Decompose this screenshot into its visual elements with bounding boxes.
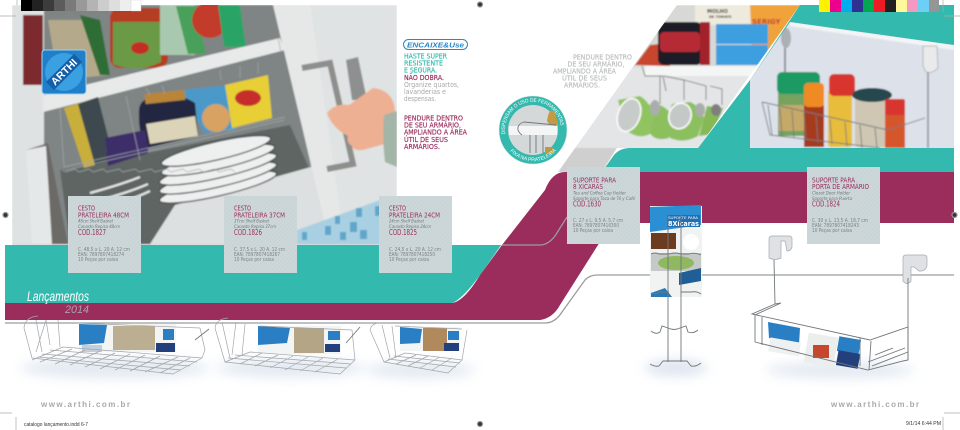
card: suporte para porta de armario	[807, 167, 880, 244]
url right: www.arthi.com.br	[830, 400, 919, 409]
card: suporte para 8 xicaras: COD.1630	[573, 200, 601, 208]
heading: Lançamentos 2014: 2014	[64, 304, 89, 316]
badge: dispensam o uso de ferramentas: DISPENSAM O USO DE FERRAMENTAS	[501, 98, 564, 134]
card: cesto prateleira 24cm: COD.1825	[389, 228, 417, 237]
card: cesto prateleira 24cm: Canasto Repisa 24cm	[389, 224, 431, 230]
text: haste super resistente: E SEGURA.	[404, 66, 437, 74]
card: suporte para 8 xicaras: C. 27 x L. 9,5 A. 5,7 cm	[573, 218, 623, 224]
text: pendure dentro maroon	[404, 114, 467, 151]
spice jars	[777, 72, 905, 148]
text: pendure dentro maroon: ARMÁRIOS.	[404, 142, 440, 151]
logo: Encaixe & Use	[404, 40, 468, 50]
text: haste super resistente: RESISTENTE	[404, 60, 443, 68]
text: pendure dentro maroon: AMPLIANDO A ÁREA	[404, 128, 467, 136]
card: suporte para 8 xicaras: 8 XÍCARAS	[573, 182, 603, 191]
product: basket 48cm	[20, 316, 210, 378]
heading: Lançamentos 2014: Lançamentos	[27, 288, 89, 304]
cmyk colour bar	[819, 0, 939, 12]
text: haste super resistente: HASTE SUPER	[404, 52, 447, 60]
green cups	[613, 95, 723, 141]
logo: ARTHI badge	[42, 50, 86, 94]
door handle	[302, 63, 353, 169]
panel: kitchen cabinet photo	[12, 2, 397, 245]
panel: cups photo: DE TOMATE	[709, 15, 732, 19]
text: pendure dentro gray: DE SEU ARMÁRIO,	[568, 60, 624, 68]
card: suporte para 8 xicaras: SUPORTE PARA	[573, 176, 616, 184]
card: cesto prateleira 48cm: 10 Peças por caixa	[78, 257, 118, 263]
logo: Encaixe & Use: ENCAIXE&Use	[407, 42, 464, 50]
jar and boxes	[182, 85, 236, 133]
plates	[160, 134, 276, 204]
panel: cups photo	[555, 5, 805, 175]
text: pendure dentro maroon: PENDURE DENTRO	[404, 114, 463, 122]
top shelf groceries	[23, 2, 246, 85]
card: cesto prateleira 37cm: 37cm Shelf Basket	[234, 218, 269, 224]
card: cesto prateleira 48cm: Canasto Repisa 48cm	[78, 224, 120, 230]
card: cesto prateleira 24cm: 24cm Shelf Basket	[389, 218, 424, 224]
card: suporte para porta de armario: EAN: 7897807418243	[812, 223, 859, 229]
hooks	[642, 66, 722, 105]
hand	[327, 88, 395, 150]
text: pendure dentro gray: PENDURE DENTRO	[573, 54, 632, 62]
card: suporte para porta de armario: Closet Door Holder	[812, 190, 851, 196]
text: haste super resistente: despensas.	[404, 95, 436, 103]
card: cesto prateleira 48cm: CESTO	[78, 204, 95, 212]
panel: cups photo: SERIGY	[752, 18, 781, 26]
card: cesto prateleira 24cm: 10 Peças por caixa	[389, 257, 429, 263]
text: pendure dentro gray: AMPLIANDO A ÁREA	[553, 66, 616, 76]
tin	[64, 98, 98, 169]
card: suporte para porta de armario: PORTA DE ARMÁRIO	[812, 182, 869, 191]
text: haste super resistente: NÃO DOBRA.	[404, 73, 444, 82]
card: cesto prateleira 24cm: C. 24,5 x L. 20 A. 12 cm	[389, 247, 441, 253]
card: cesto prateleira 37cm: EAN: 7897807418267	[234, 252, 280, 258]
card: cesto prateleira 24cm	[379, 196, 452, 273]
teal band left page	[5, 245, 501, 303]
shelf	[43, 38, 285, 112]
teal band right page	[602, 5, 954, 172]
text: pendure dentro gray: ÚTIL DE SEUS	[562, 74, 607, 82]
card: cesto prateleira 48cm: PRATELEIRA 48CM	[78, 212, 129, 220]
card: cesto prateleira 37cm: Canasto Repisa 37cm	[234, 224, 276, 230]
hook left	[785, 22, 787, 82]
card: cesto prateleira 24cm: PRATELEIRA 24CM	[389, 212, 440, 220]
card: suporte para porta de armario: C. 30 x L. 13,5 A. 18,7 cm	[812, 218, 868, 224]
card: cesto prateleira 37cm: C. 37,5 x L. 20 A. 12 cm	[234, 247, 285, 253]
card: cesto prateleira 37cm: PRATELEIRA 37CM	[234, 212, 285, 220]
card: suporte para 8 xicaras	[567, 167, 640, 244]
footer slug right: 9/1/14 6:44 PM	[906, 421, 941, 427]
card: suporte para porta de armario: 10 Peças por caixa	[812, 228, 852, 234]
product: basket 24cm	[365, 323, 475, 378]
text: haste super resistente: Organize quartos,	[404, 81, 459, 89]
badge: dispensam o uso de ferramentas: FIXA NA PRATELEIRA	[510, 148, 556, 162]
product: eight cup holder with packaging: 8Xícaras	[668, 220, 699, 228]
panel: door holder photo	[745, 20, 955, 150]
footer slug left: catalogo lançamento.indd 6-7	[24, 422, 88, 428]
product: eight cup holder with packaging: SUPORTE PARA	[668, 216, 699, 220]
gray colour bar	[21, 0, 141, 11]
card: cesto prateleira 37cm: COD.1826	[234, 228, 262, 237]
card: suporte para 8 xicaras: Soporte para Taza de Té y Café	[573, 195, 635, 202]
hook right	[923, 46, 938, 72]
spice basket wire	[762, 102, 925, 148]
text: pendure dentro gray: ARMÁRIOS.	[564, 80, 600, 90]
heading: Lançamentos 2014	[27, 288, 89, 316]
badge: dispensam o uso de ferramentas	[498, 96, 568, 164]
card: suporte para 8 xicaras: 10 Peças por caixa	[573, 228, 613, 234]
shelf groceries	[695, 5, 755, 25]
product: eight cup holder with packaging	[644, 205, 708, 376]
teal wedge	[480, 245, 501, 275]
text: pendure dentro maroon: DE SEU ARMÁRIO,	[404, 120, 461, 130]
blue tile	[297, 200, 379, 245]
maroon band left page	[5, 172, 954, 320]
text: pendure dentro maroon: ÚTIL DE SEUS	[404, 135, 448, 144]
url left: www.arthi.com.br	[40, 400, 130, 409]
card: cesto prateleira 37cm: CESTO	[234, 204, 251, 212]
card: cesto prateleira 24cm: CESTO	[389, 204, 406, 212]
text: haste super resistente	[404, 52, 459, 103]
card: cesto prateleira 48cm: COD.1827	[78, 228, 106, 237]
card: suporte para porta de armario: Soporte para Puerta	[812, 196, 852, 202]
card: cesto prateleira 48cm: 48cm Shelf Basket	[78, 218, 113, 224]
card: cesto prateleira 24cm: EAN: 7897807418250	[389, 252, 435, 258]
text: haste super resistente: lavanderias e	[404, 88, 446, 96]
panel: cups photo: MOLHO	[707, 9, 728, 15]
card: suporte para 8 xicaras: EAN: 7897807416300	[573, 223, 619, 229]
card: cesto prateleira 48cm: C. 48,5 x L. 20 A. 12 cm	[78, 247, 130, 253]
product: basket 37cm	[215, 318, 365, 377]
gray rule lines	[5, 217, 954, 323]
card: cesto prateleira 37cm: 10 Peças por caixa	[234, 257, 274, 263]
text: pendure dentro gray	[553, 54, 632, 90]
product: door holder basket	[752, 236, 927, 378]
card: cesto prateleira 48cm: EAN: 7897807418274	[78, 252, 124, 258]
card: cesto prateleira 48cm	[68, 196, 141, 273]
card: suporte para porta de armario: COD.1824	[812, 200, 840, 208]
logo: ARTHI badge: ARTHI	[49, 57, 80, 88]
card: suporte para porta de armario: SUPORTE PARA	[812, 176, 855, 184]
wire basket	[60, 38, 285, 171]
card: cesto prateleira 37cm	[224, 196, 297, 273]
card: suporte para 8 xicaras: Tea and Coffee Cup Holder	[573, 190, 627, 196]
